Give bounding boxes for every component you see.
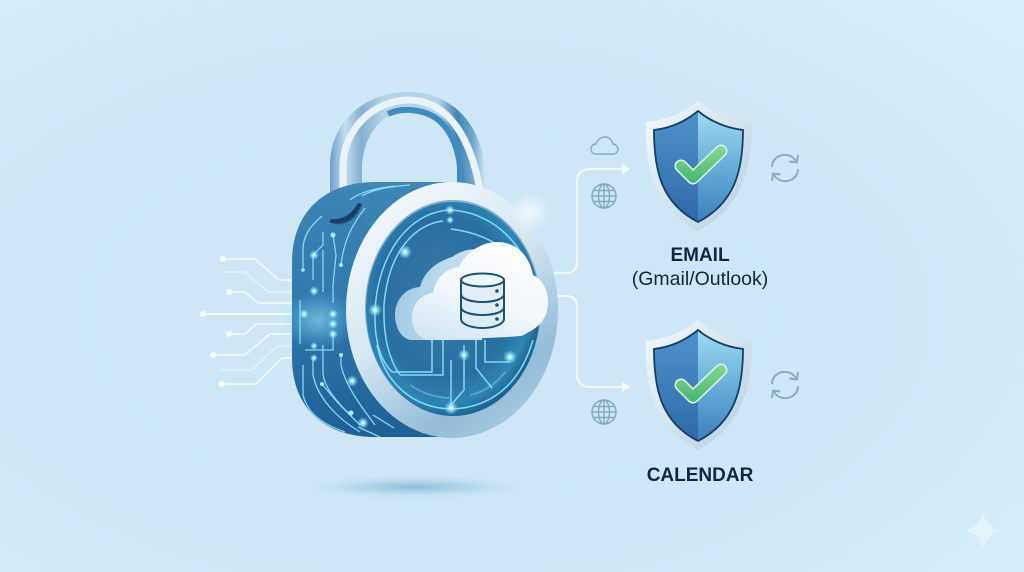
database icon xyxy=(461,274,504,328)
icon: sync top xyxy=(772,155,798,181)
shackle xyxy=(330,92,485,226)
label: email: EMAIL xyxy=(670,245,730,266)
dial ring xyxy=(346,182,558,438)
label: gmail outlook: (Gmail/Outlook) xyxy=(632,268,768,290)
connector arrow: to email xyxy=(553,164,630,273)
lock body xyxy=(280,182,450,437)
icon: sparkle watermark xyxy=(965,513,1001,548)
dial face xyxy=(366,202,540,416)
cloud xyxy=(395,242,548,340)
label: calendar: CALENDAR xyxy=(647,465,754,486)
icon: globe top xyxy=(592,184,616,208)
icon: globe bottom xyxy=(592,400,616,424)
icon: email shield xyxy=(646,100,752,231)
connector arrow: to calendar xyxy=(556,296,630,392)
icon: small cloud xyxy=(591,137,618,154)
icon: sync bottom xyxy=(772,372,798,398)
padlock xyxy=(280,92,558,438)
icon: calendar shield xyxy=(646,319,752,450)
circuit lines entering the lock xyxy=(200,256,333,387)
ground shadow xyxy=(295,474,535,500)
